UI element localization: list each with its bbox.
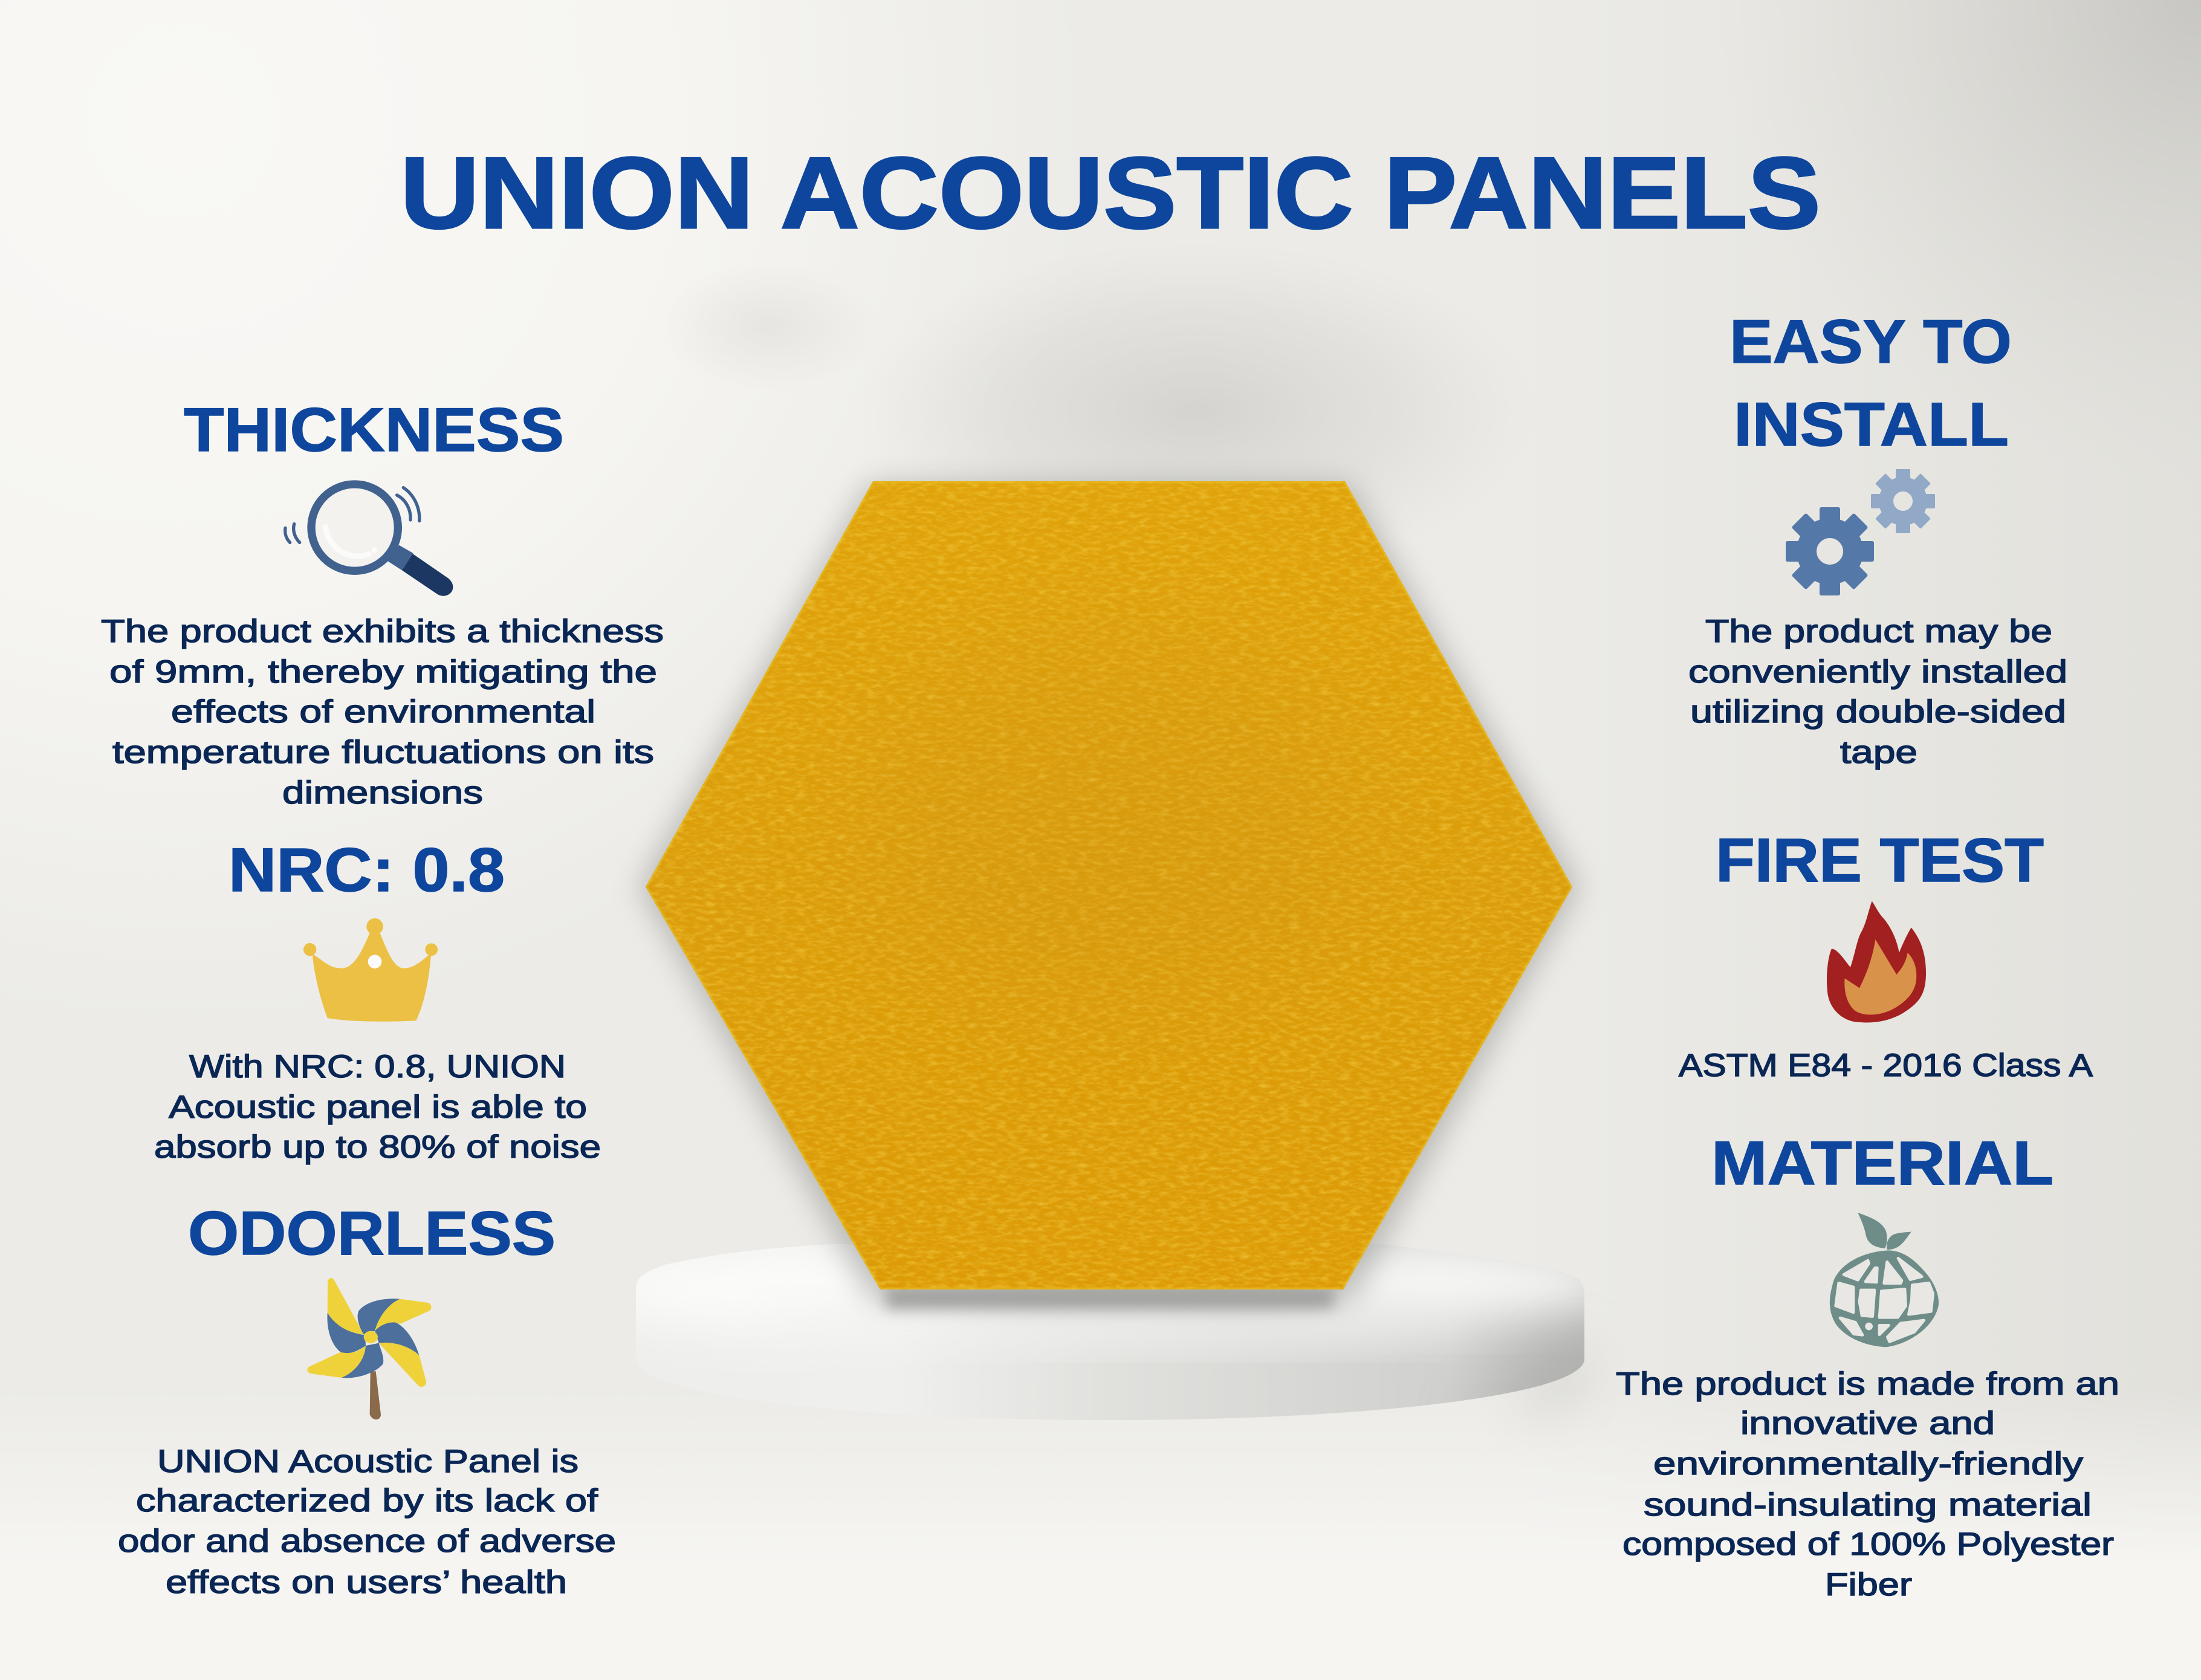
text: material description: sound-insulating material [1644,1487,2092,1523]
icon: magnifying glass [285,484,453,596]
heading: material: MATERIAL [1711,1129,2054,1198]
text: odorless description: characterized by its lack of [136,1483,598,1519]
heading: fire test: FIRE TEST [1716,826,2044,895]
text: material description: The product is made from an [1616,1366,2119,1402]
text: install description: conveniently installed [1688,654,2067,690]
text: nrc description: Acoustic panel is able to [169,1089,587,1125]
text: thickness description: The product exhibits a thickness [101,614,664,649]
icon: crown [303,918,438,1022]
text: nrc description [154,1049,601,1165]
text: material description [1616,1366,2119,1603]
panel: nrc [154,835,601,1165]
icon: pinwheel [307,1278,432,1419]
text: fire test rating: ASTM E84 - 2016 Class A [1679,1048,2093,1083]
text: material description: composed of 100% Polyester [1622,1526,2114,1562]
heading: easy to install: EASY TO [1729,307,2012,376]
heading: nrc: NRC: 0.8 [229,835,505,904]
heading: odorless: ODORLESS [188,1199,556,1268]
text: odorless description: odor and absence of adverse [118,1523,616,1559]
text: material description: Fiber [1825,1567,1912,1603]
hexagon panel shadow [640,484,1579,1308]
text: material description: environmentally-friendly [1653,1446,2084,1482]
text: thickness description: effects of environmental [171,694,595,730]
hexagon acoustic panel [641,478,1578,1294]
panel: fire test [1679,826,2093,1083]
heading: easy to install: INSTALL [1734,390,2009,459]
text: install description: The product may be [1705,614,2052,649]
text: nrc description: With NRC: 0.8, UNION [189,1049,566,1085]
text: thickness description [101,614,664,811]
panel: easy to install [1688,307,2067,770]
title: UNION ACOUSTIC PANELS [400,136,1821,250]
panel: material [1616,1129,2119,1603]
text: material description: innovative and [1740,1406,1995,1441]
text: odorless description: UNION Acoustic Panel is [157,1444,579,1479]
text: thickness description: of 9mm, thereby mitigating the [109,654,657,690]
heading: easy to install [1729,307,2012,459]
text: nrc description: absorb up to 80% of noise [154,1129,601,1165]
text: thickness description: temperature fluctuations on its [112,735,654,770]
text: install description: utilizing double-sided [1690,694,2066,730]
text: odorless description [118,1444,616,1600]
icon: gears [1786,469,1935,595]
podium [586,1239,1632,1427]
text: thickness description: dimensions [282,775,483,811]
text: odorless description: effects on users’ health [166,1565,567,1600]
text: install description [1688,614,2067,770]
panel: odorless [118,1199,616,1600]
heading: thickness: THICKNESS [184,395,564,464]
panel: thickness [101,395,664,811]
icon: flame [1827,901,1926,1022]
icon: globe with leaves [1830,1213,1939,1347]
text: install description: tape [1840,735,1917,770]
